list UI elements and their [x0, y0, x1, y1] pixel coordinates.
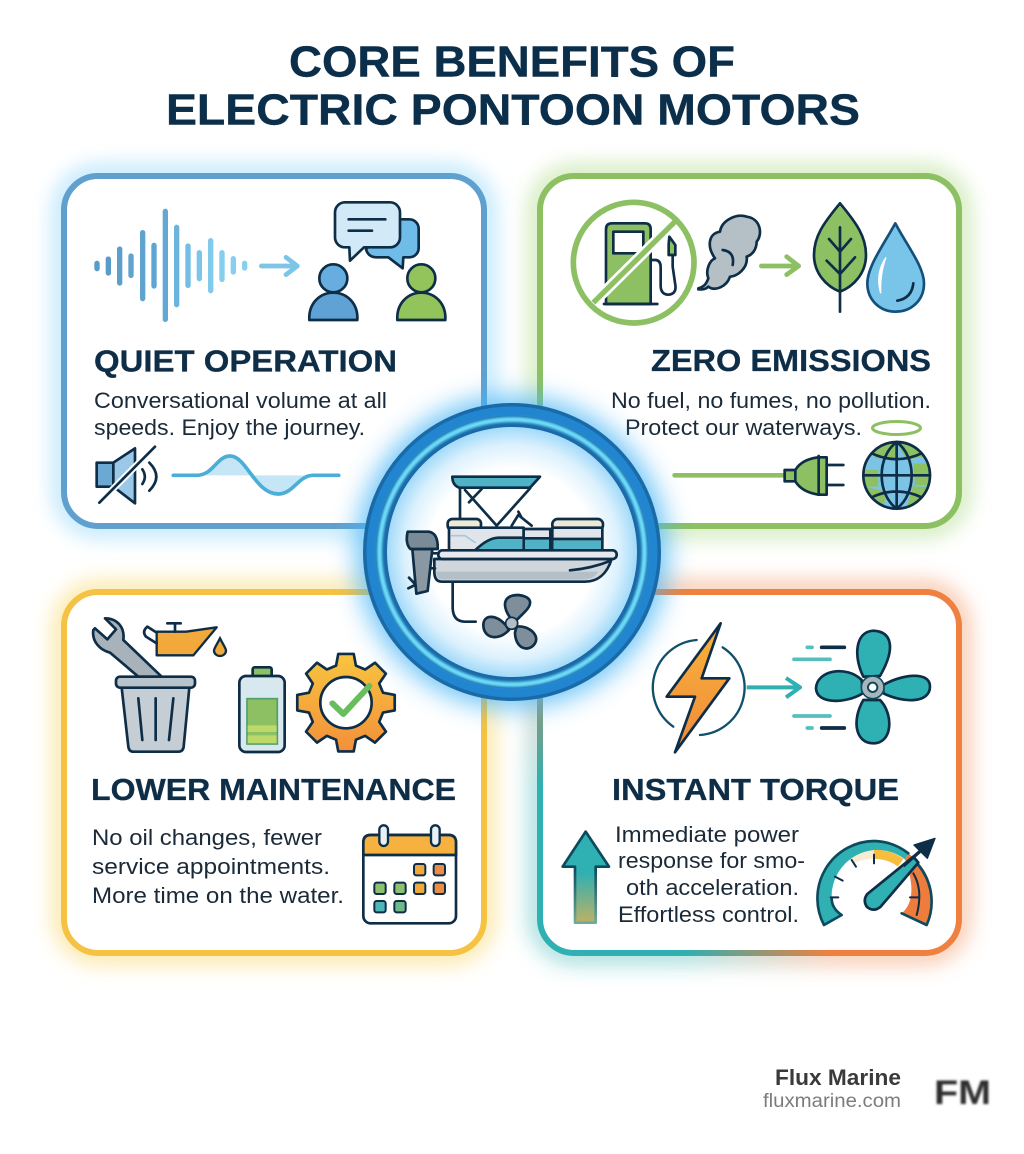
body text: No oil changes, fewer: [92, 825, 322, 850]
icon: lightning bolt: [653, 623, 745, 752]
body text: Effortless control.: [618, 902, 799, 927]
panel: lower maintenance: [62, 590, 486, 955]
heading: LOWER MAINTENANCE: [91, 772, 456, 807]
body text: response for smo-: [618, 848, 805, 873]
icon: no fuel pump: [573, 202, 694, 323]
body text: [615, 822, 805, 927]
footer brand: [763, 1065, 991, 1112]
body text: [611, 388, 931, 440]
title: CORE BENEFITS OF: [289, 38, 735, 86]
body text: More time on the water.: [92, 883, 344, 908]
footer brand: fluxmarine.com: [763, 1091, 901, 1112]
panel: instant torque: [538, 590, 961, 955]
icon: oil can: [144, 623, 226, 656]
icon: spinning propeller: [794, 631, 930, 743]
icon: pontoon boat: [407, 477, 617, 648]
body text: Immediate power: [615, 822, 799, 847]
icon: battery: [239, 667, 285, 752]
icon: water drop: [867, 223, 924, 312]
body text: oth acceleration.: [626, 875, 799, 900]
body text: service appointments.: [92, 854, 330, 879]
icon: globe: [863, 442, 930, 509]
icon: wrench in bin: [93, 618, 195, 752]
body text: [94, 388, 387, 440]
central badge: pontoon boat: [356, 396, 668, 708]
body text: Protect our waterways.: [625, 415, 862, 440]
footer brand: Flux Marine: [775, 1065, 901, 1090]
heading: INSTANT TORQUE: [612, 772, 899, 807]
icon: two people talking: [309, 202, 445, 320]
title: [166, 38, 860, 134]
icon: sound waveform to arrow: [97, 211, 297, 319]
icon: sound wave line: [173, 456, 339, 494]
title: ELECTRIC PONTOON MOTORS: [166, 86, 860, 134]
icon: leaf: [814, 203, 866, 312]
arrow: [747, 678, 800, 697]
logo: FM: FM: [934, 1074, 991, 1112]
heading: QUIET OPERATION: [94, 344, 397, 378]
icon: smoke cloud: [698, 216, 760, 289]
icon: halo: [872, 422, 920, 434]
icon: up arrow: [563, 832, 609, 923]
heading: ZERO EMISSIONS: [651, 343, 931, 378]
panel: quiet operation: [62, 174, 486, 528]
icon: gear with check: [297, 654, 395, 751]
arrow: [761, 257, 799, 275]
panel: zero emissions: [538, 174, 961, 528]
body text: [92, 825, 344, 908]
icon: calendar: [363, 825, 456, 923]
body text: speeds. Enjoy the journey.: [94, 415, 365, 440]
icon: speedometer: [817, 838, 935, 925]
body text: Conversational volume at all: [94, 388, 387, 413]
body text: No fuel, no fumes, no pollution.: [611, 388, 931, 413]
icon: plug on cord: [675, 456, 843, 495]
icon: muted speaker: [97, 447, 156, 503]
